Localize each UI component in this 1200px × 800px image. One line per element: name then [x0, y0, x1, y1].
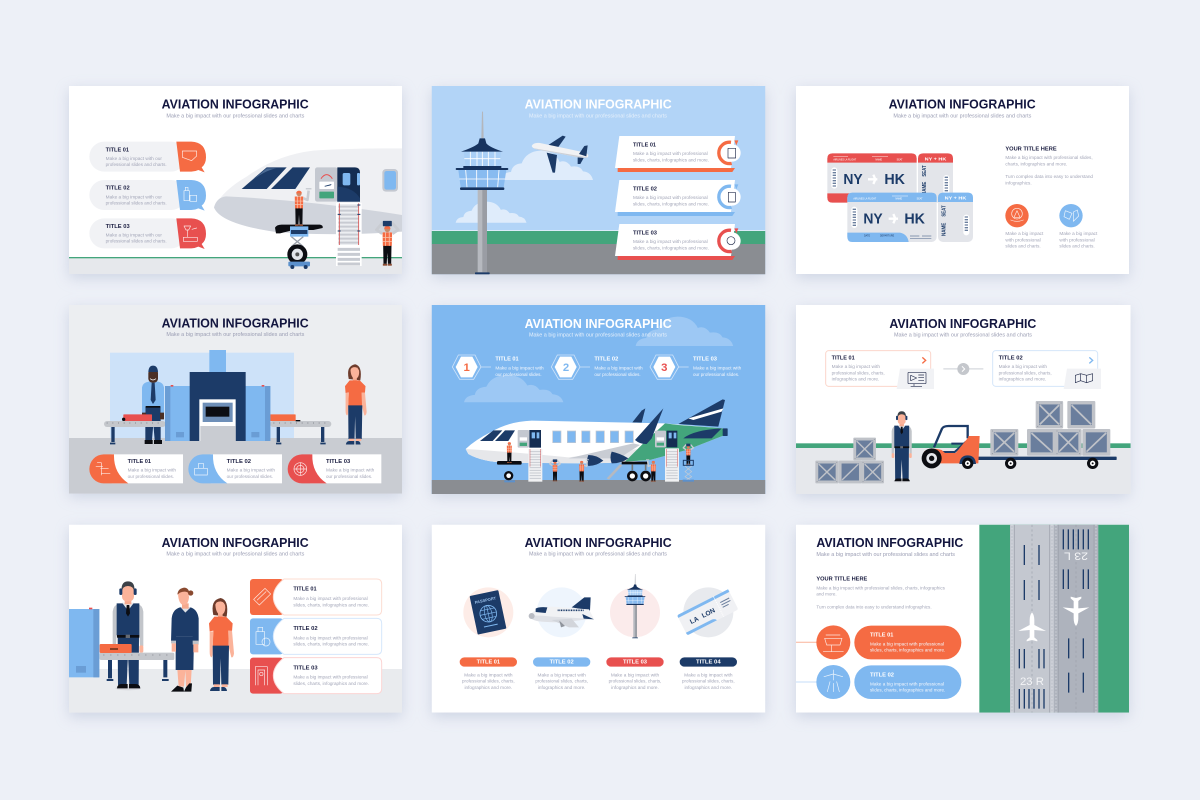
card 01: professional slides, charts,	[832, 370, 885, 375]
label 01	[460, 657, 517, 690]
trailer with crates	[975, 401, 1117, 469]
subtitle: Make a big impact with our professional slides and charts	[893, 113, 1032, 119]
card 01: Make a big impact with professional	[633, 151, 708, 156]
security officer	[142, 366, 164, 444]
icon: control tower	[610, 574, 660, 638]
red ticket: SEAT	[922, 165, 928, 177]
panel: slide 2 control tower	[432, 86, 765, 274]
card 03: Make a big impact with	[326, 468, 375, 473]
red ticket: AIRLINES LA FLIGHT	[833, 158, 857, 161]
panel: slide 8 four icons	[432, 525, 765, 713]
aircraft nose	[214, 148, 402, 234]
label 02: professional slides, charts,	[535, 679, 588, 684]
caption right: slides and charts.	[1059, 244, 1095, 249]
caption right	[1059, 231, 1098, 249]
card 01: our professional slides.	[128, 474, 174, 479]
subtitle: Make a big impact with our professional slides and charts	[529, 333, 667, 339]
card 03: slides, charts, infographics and more.	[633, 246, 709, 251]
label 01: infographics and more.	[464, 685, 512, 690]
card 01: TITLE 01	[633, 142, 656, 148]
card 03	[288, 454, 381, 483]
step 3: TITLE 03	[693, 357, 717, 363]
callout 01: professional slides and charts.	[106, 162, 167, 167]
callout 02: professional slides and charts.	[106, 200, 167, 205]
card 01: slides, charts, infographics and more.	[633, 158, 709, 163]
card 03: our professional slides.	[326, 474, 372, 479]
card 01	[615, 136, 741, 172]
step 1: Make a big impact with	[495, 365, 544, 370]
blue ticket: NY	[863, 211, 883, 227]
subtitle: Make a big impact with our professional slides and charts	[529, 113, 667, 119]
card 02: Make a big impact with professional	[633, 195, 708, 200]
card 02: our professional slides.	[227, 474, 273, 479]
card 02	[993, 351, 1101, 389]
subtitle: Make a big impact with our professional slides and charts	[166, 552, 305, 558]
card 02: slides, charts, infographics and more.	[293, 642, 369, 647]
label 04: Make a big impact with	[684, 672, 733, 677]
caption left: slides and charts.	[1005, 244, 1041, 249]
label 02: infographics and more.	[538, 685, 585, 690]
step 2: Make a big impact with	[594, 365, 643, 370]
step 2: 2	[563, 362, 569, 374]
step 3: 3	[661, 362, 667, 374]
label 02: TITLE 02	[550, 660, 574, 666]
step 2	[551, 355, 643, 379]
card 02: professional slides, charts,	[999, 370, 1052, 375]
blue ticket: DATE	[864, 234, 870, 237]
passenger	[345, 364, 367, 444]
blue ticket: DEPARTURE	[880, 234, 895, 237]
item 01	[796, 625, 961, 659]
title: AVIATION INFOGRAPHIC	[889, 317, 1036, 331]
card 03: TITLE 03	[326, 459, 350, 465]
card 02: TITLE 02	[633, 186, 657, 192]
label 03: infographics and more.	[611, 685, 659, 690]
text block: YOUR TITLE HERE	[816, 577, 868, 583]
callout 03: professional slides and charts.	[106, 239, 167, 244]
icon: location	[1005, 204, 1029, 227]
label 04: professional slides, charts,	[682, 679, 735, 684]
control tower	[456, 112, 508, 274]
card 02: infographics and more.	[999, 377, 1046, 382]
nose gear with worker	[275, 188, 323, 269]
callout 01	[89, 142, 206, 172]
airliner	[466, 399, 728, 482]
subtitle: Make a big impact with our professional slides and charts	[529, 552, 667, 558]
step 2: our professional slides.	[594, 372, 641, 377]
label 03	[606, 657, 664, 690]
panel: slide 3 boarding tickets	[796, 86, 1129, 274]
text block: infographics.	[1005, 180, 1032, 185]
runway view: 23 L	[1064, 550, 1088, 562]
panel: slide 1 aircraft service	[69, 86, 402, 274]
panel: slide 7 airline staff	[69, 525, 402, 713]
card 03: Make a big impact with professional	[293, 675, 368, 680]
callout 02	[89, 180, 206, 211]
label 03: professional slides, charts,	[609, 679, 661, 684]
card 02	[188, 454, 282, 483]
card 02: TITLE 02	[999, 356, 1023, 362]
card 03: TITLE 03	[633, 230, 657, 236]
card 01: TITLE 01	[293, 587, 317, 593]
title: AVIATION INFOGRAPHIC	[162, 536, 309, 550]
text block: Make a big impact with professional slides,	[1005, 155, 1093, 160]
blue ticket: SEAT	[917, 198, 923, 201]
text block: YOUR TITLE HERE	[1005, 146, 1057, 152]
text block: and more.	[816, 592, 837, 597]
card 01	[89, 454, 183, 483]
ground worker	[376, 221, 398, 266]
card 01	[250, 579, 382, 615]
card 03: Make a big impact with professional	[633, 239, 708, 244]
red ticket: NAME	[875, 158, 883, 161]
step 3	[650, 355, 742, 379]
runway view	[979, 525, 1129, 713]
ground crew member	[892, 411, 912, 483]
callout 01: TITLE 01	[106, 147, 129, 153]
step 1: TITLE 01	[495, 357, 519, 363]
card 02: Make a big impact with professional	[293, 635, 368, 640]
label 01: professional slides, charts,	[462, 679, 515, 684]
red ticket: NY	[843, 172, 863, 188]
card 01: slides, charts, infographics and more.	[293, 602, 369, 607]
card 02	[250, 618, 382, 654]
callout 03: Make a big impact with our	[106, 233, 162, 238]
title: AVIATION INFOGRAPHIC	[525, 536, 672, 550]
title: AVIATION INFOGRAPHIC	[816, 536, 963, 550]
panel: slide 6 cargo forklift	[796, 305, 1131, 494]
blue ticket: NAME	[942, 222, 948, 236]
airplane	[532, 136, 588, 173]
label 04	[680, 657, 737, 690]
caption right: with professional	[1059, 237, 1095, 242]
item 02: TITLE 02	[870, 673, 894, 679]
item 01: slides, charts, infographics and more.	[870, 648, 945, 653]
workers	[507, 442, 694, 482]
label 04: TITLE 04	[696, 660, 721, 666]
step 1	[452, 355, 544, 379]
subtitle: Make a big impact with our professional slides and charts	[816, 552, 955, 558]
card 02	[615, 180, 741, 216]
text block: Turn complex data into easy to understand infographics.	[816, 604, 932, 609]
red ticket: HK	[884, 172, 906, 188]
step 2: TITLE 02	[594, 357, 618, 363]
card 01	[826, 351, 934, 389]
step 3: our professional slides.	[693, 372, 739, 377]
item 01: Make a big impact with professional	[870, 641, 944, 646]
step 1: 1	[464, 362, 470, 374]
icon: routes	[1059, 204, 1083, 227]
card 02: TITLE 02	[293, 626, 318, 632]
text block: Make a big impact with professional slides, charts, infographics	[816, 585, 946, 590]
text block	[1005, 146, 1093, 185]
label 04: infographics and more.	[684, 685, 732, 690]
stairs	[528, 448, 679, 482]
slide shadows	[69, 90, 1129, 717]
card 01: TITLE 01	[128, 459, 151, 465]
conveyors and luggage	[104, 414, 331, 444]
red ticket: SEAT	[897, 158, 903, 161]
label 02: Make a big impact with	[537, 672, 586, 677]
subtitle: Make a big impact with our professional slides and charts	[166, 113, 305, 119]
label 03: TITLE 03	[623, 660, 647, 666]
forklift	[922, 426, 980, 469]
blue ticket: NY + HK	[945, 196, 967, 202]
caption right: Make a big impact	[1059, 231, 1098, 236]
card 03: TITLE 03	[293, 665, 318, 671]
step 3: Make a big impact with	[693, 365, 742, 370]
callout 03: TITLE 03	[106, 224, 130, 230]
item 02	[796, 665, 961, 699]
title: AVIATION INFOGRAPHIC	[162, 98, 309, 112]
item 02: Make a big impact with professional	[870, 681, 944, 686]
callout 03	[89, 218, 206, 249]
card 03: slides, charts, infographics and more.	[293, 681, 369, 686]
connector arrow	[943, 363, 983, 375]
callout 02: Make a big impact with our	[106, 194, 162, 199]
callout 01: Make a big impact with our	[106, 156, 162, 161]
card 01: Make a big impact with professional	[293, 596, 368, 601]
card 02: TITLE 02	[227, 459, 251, 465]
icon: boarding pass: LA	[689, 616, 700, 626]
caption left: with professional	[1005, 237, 1041, 242]
runway view: 23 R	[1020, 676, 1044, 688]
text block: Turn complex data into easy to understand	[1005, 174, 1093, 179]
card 01: Make a big impact with	[128, 468, 176, 473]
flight attendant	[171, 588, 199, 692]
red ticket: NY + HK	[925, 156, 947, 162]
blue ticket: HK	[904, 211, 926, 227]
blue ticket: SEAT	[942, 205, 948, 217]
card 01: infographics and more.	[832, 377, 879, 382]
card 01: TITLE 01	[832, 356, 855, 362]
title: AVIATION INFOGRAPHIC	[162, 316, 309, 330]
icon: airplane	[529, 587, 594, 637]
card 02: Make a big impact with	[227, 468, 275, 473]
conveyor and suitcase	[100, 644, 174, 660]
subtitle: Make a big impact with our professional slides and charts	[894, 333, 1032, 339]
boarding stairs	[336, 203, 362, 266]
label 01: TITLE 01	[477, 660, 500, 666]
text block	[816, 577, 946, 609]
panel: slide 5 airliner side view	[432, 305, 765, 494]
label 03: Make a big impact with	[611, 672, 660, 677]
label 02	[533, 657, 590, 690]
label 01: Make a big impact with	[464, 672, 513, 677]
red ticket: NAME	[922, 181, 928, 195]
blue ticket: NAME	[895, 198, 903, 201]
text block: charts, infographics and more.	[1005, 162, 1067, 167]
panel: slide 4 security scanner	[69, 305, 402, 494]
card 03	[250, 658, 382, 694]
passenger	[209, 598, 234, 691]
title: AVIATION INFOGRAPHIC	[889, 98, 1036, 112]
card 02: slides, charts, infographics and more.	[633, 202, 709, 207]
icon: boarding pass	[677, 587, 738, 637]
baggage scanner	[69, 608, 169, 681]
card 02: Make a big impact with	[999, 364, 1047, 369]
blue ticket	[847, 193, 973, 242]
callout 02: TITLE 02	[106, 186, 130, 192]
card 03	[615, 224, 741, 260]
subtitle: Make a big impact with our professional slides and charts	[166, 332, 305, 338]
clouds	[464, 317, 733, 402]
left crates	[815, 438, 884, 483]
caption left: Make a big impact	[1005, 231, 1044, 236]
icon: passport	[463, 587, 513, 637]
x-ray scanner	[165, 350, 270, 441]
title: AVIATION INFOGRAPHIC	[525, 98, 672, 112]
clouds	[456, 151, 593, 223]
caption left	[1005, 231, 1044, 249]
icon: passport: PASSPORT	[474, 595, 497, 605]
title: AVIATION INFOGRAPHIC	[525, 317, 672, 331]
step 1: our professional slides.	[495, 372, 542, 377]
blue ticket: AIRLINES LA FLIGHT	[853, 198, 877, 201]
panel: slide 9 runway	[796, 525, 1129, 713]
red ticket	[827, 153, 953, 203]
item 01: TITLE 01	[870, 632, 893, 638]
item 02: slides, charts, infographics and more.	[870, 687, 945, 692]
card 01: Make a big impact with	[832, 364, 880, 369]
crew member	[113, 581, 143, 690]
icon: boarding pass: LON	[701, 607, 717, 620]
